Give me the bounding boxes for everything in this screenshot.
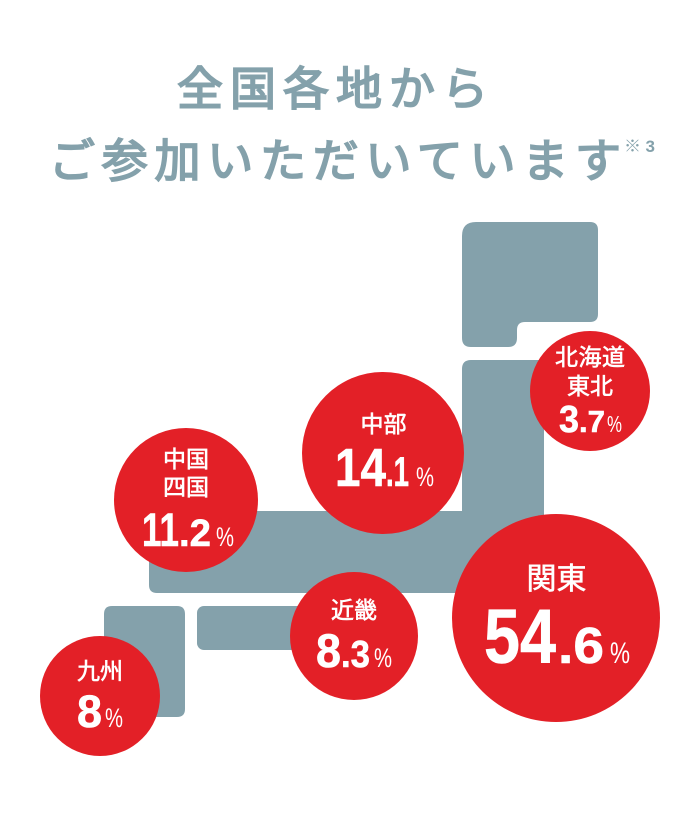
bubble: Kyushu 8% [40,636,160,756]
bubble: Chugoku Shikoku 11.2%: % [216,522,234,552]
bubble: Hokkaido Tohoku 3.7%: 東北 [567,373,613,399]
bubble: Chubu 14.1%: 14 [335,438,386,498]
map: Shikoku [197,606,322,650]
bubble: Hokkaido Tohoku 3.7%: 北海道 [555,344,625,370]
bubble: Kanto 54.6%: 54 [484,594,556,680]
bubble: Kinki 8.3%: % [374,643,392,673]
bubble: Kanto 54.6%: .6 [558,617,604,674]
bubble: Chubu 14.1%: 中部 [360,411,406,437]
bubble: Kinki 8.3%: 8 [316,624,341,677]
bubble: Hokkaido Tohoku 3.7%: % [607,411,622,437]
title: 全国各地から [177,63,488,115]
bubble: Chubu 14.1%: % [416,462,434,492]
map: Kyushu [104,606,185,717]
bubble: Kinki 8.3% [290,572,418,700]
bubble: Hokkaido Tohoku 3.7%: 3 [559,399,579,441]
bubble: Chugoku Shikoku 11.2%: 中国 [163,446,209,472]
map: Hokkaido [462,222,598,347]
bubble: Kinki 8.3%: 近畿 [331,597,377,623]
map: Honshu [149,360,544,593]
bubble: Kyushu 8%: % [105,703,123,733]
bubble: Kanto 54.6%: 関東 [526,563,586,596]
bubble: Kyushu 8%: 8 [77,686,102,737]
bubble: Hokkaido Tohoku 3.7%: .7 [579,404,605,439]
bubble: Kyushu 8%: 九州 [77,658,123,684]
bubble: Chugoku Shikoku 11.2% [114,428,258,572]
bubble: Chugoku Shikoku 11.2%: .2 [179,513,211,555]
title: ※3 [624,137,655,156]
bubble: Chugoku Shikoku 11.2%: 四国 [163,474,209,500]
bubble: Chugoku Shikoku 11.2%: 11 [142,503,179,556]
bubble: Chubu 14.1%: .1 [386,448,409,495]
bubble: Kinki 8.3%: .3 [341,634,370,676]
title [49,63,655,187]
bubble: Chubu 14.1% [302,372,464,534]
map of Japan [104,222,598,717]
bubble: Kanto 54.6% [452,514,660,722]
bubble: Hokkaido Tohoku 3.7% [530,331,650,451]
bubble: Kanto 54.6%: % [610,637,630,670]
title: ご参加いただいています [49,135,621,187]
